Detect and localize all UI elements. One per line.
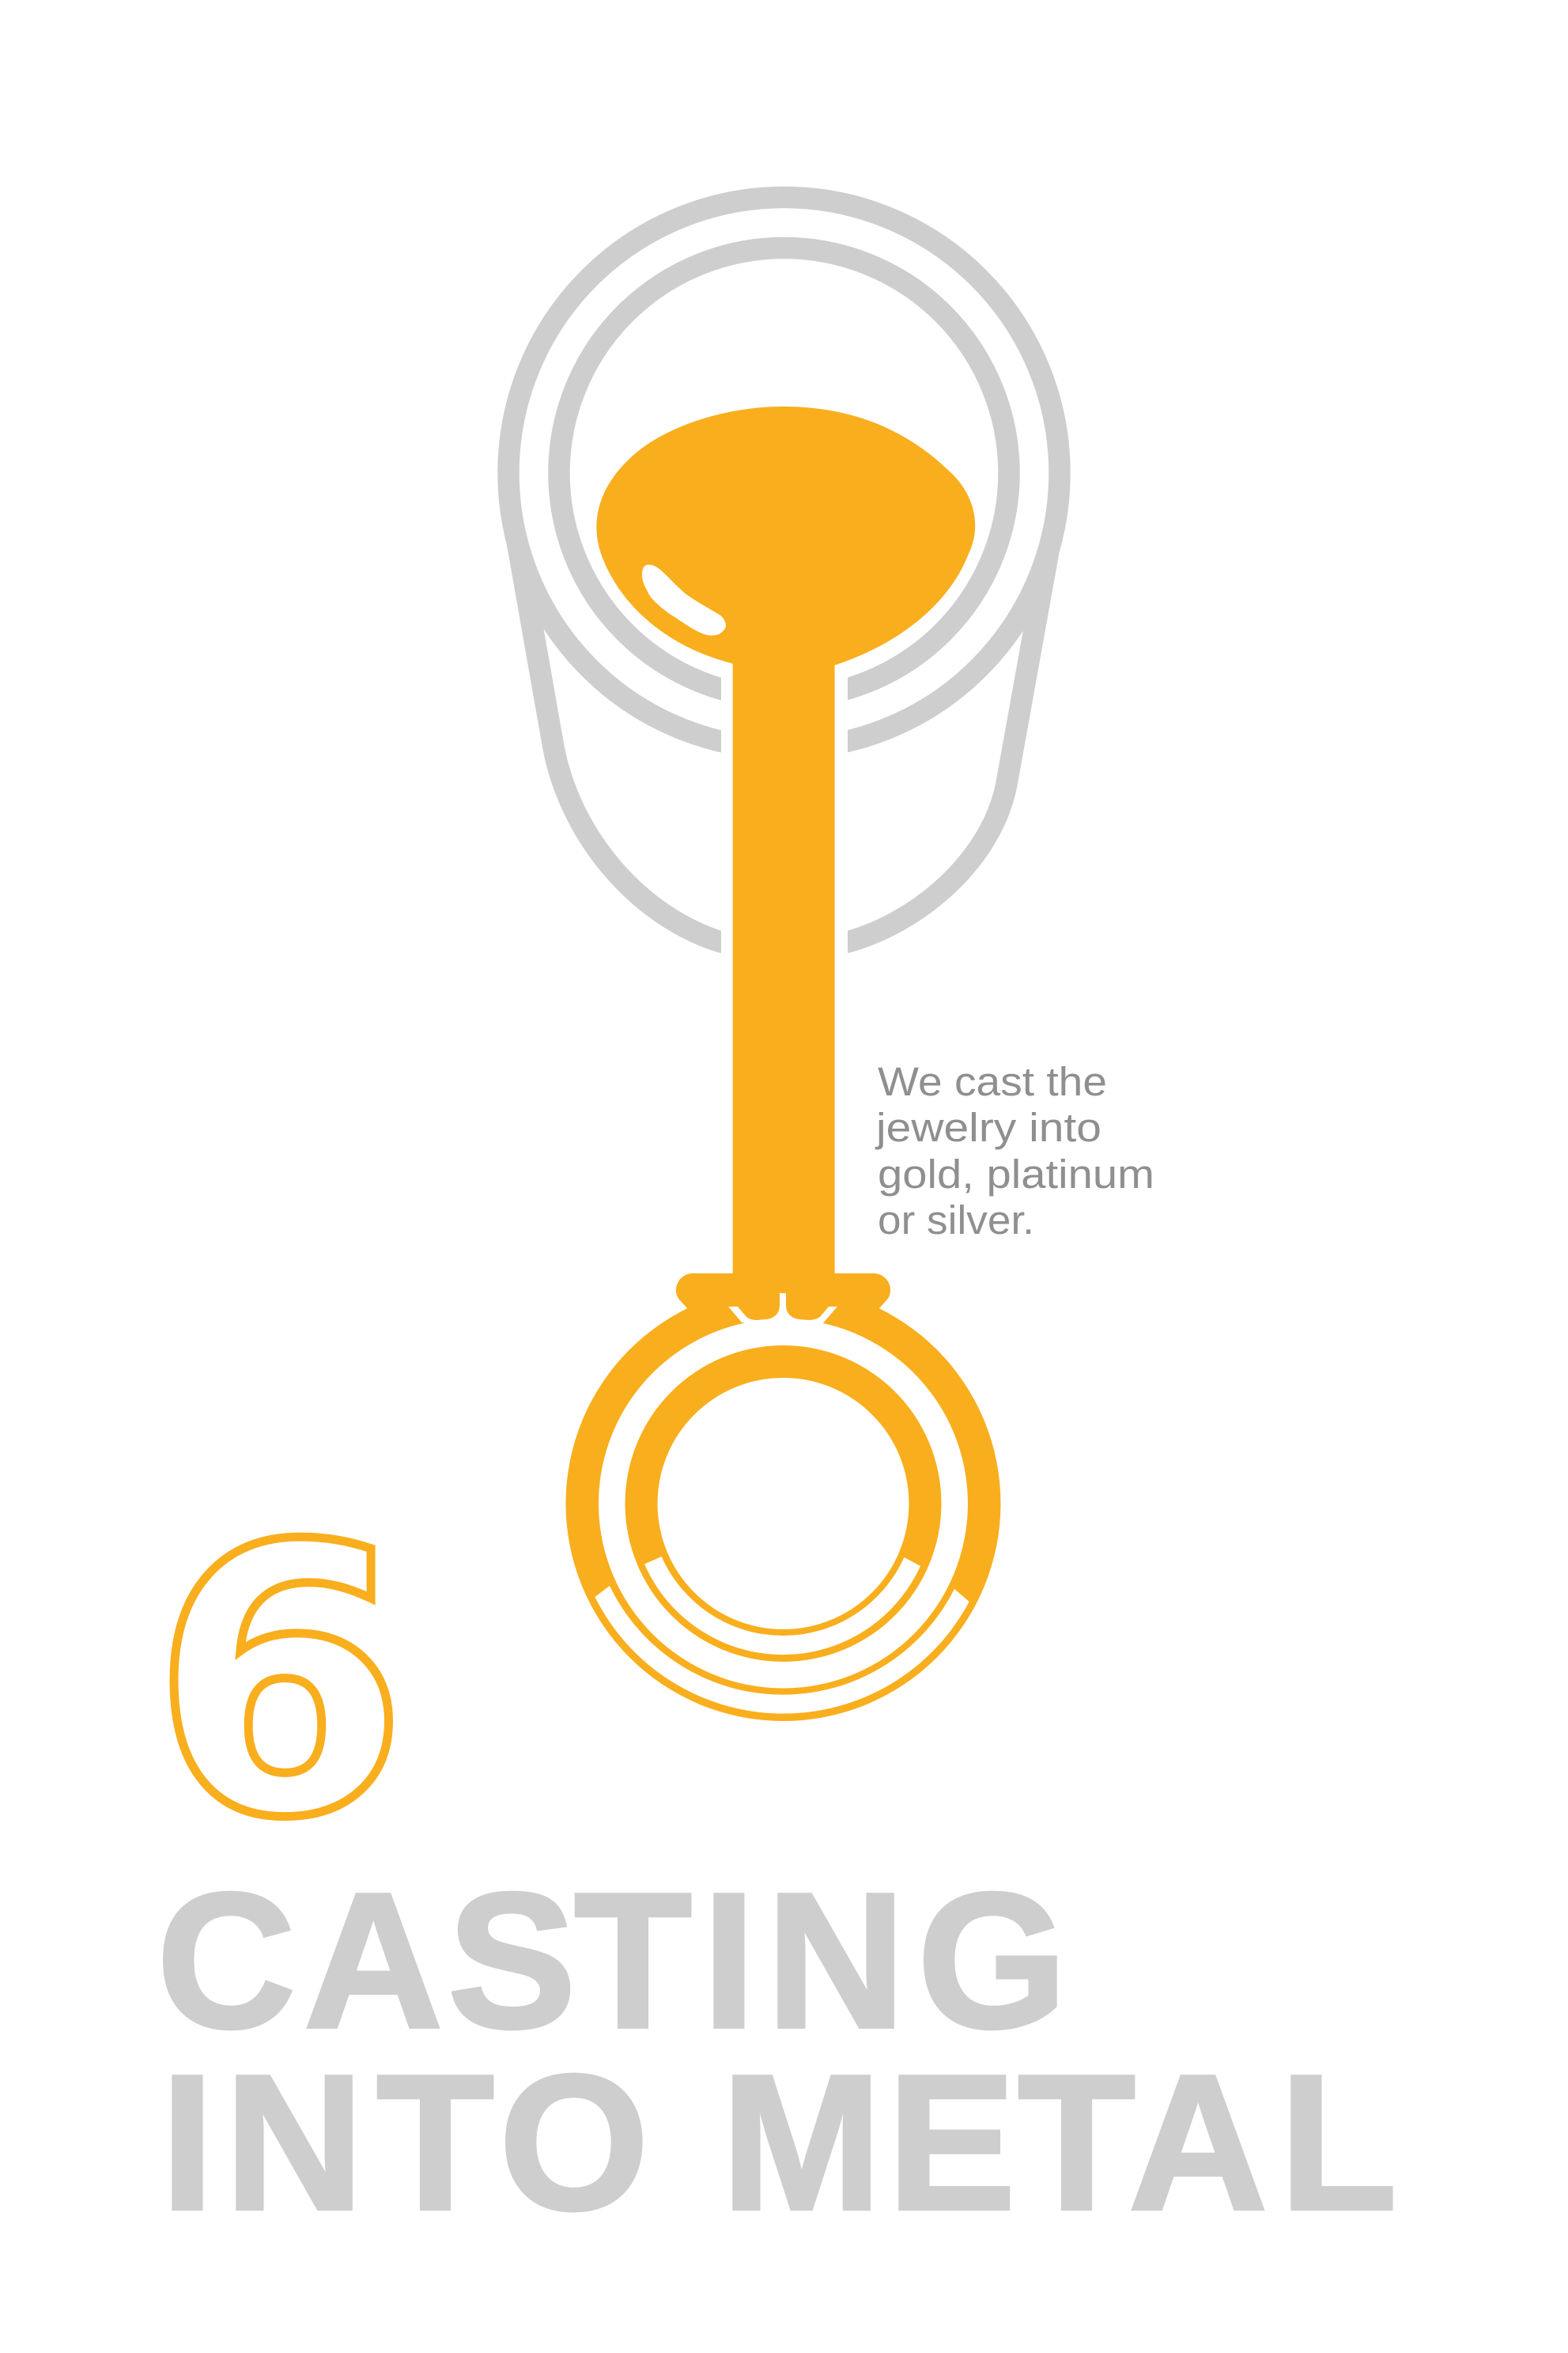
casting sprue head [676,1273,890,1323]
unfilled channel of inner ring [644,1557,920,1655]
line 3: gold, platinum [878,1152,1154,1197]
title line 1: CASTING [157,1852,1067,2068]
unfilled channel of outer ring [595,1586,969,1714]
crucible body [512,514,1051,949]
crucible inner rim [559,248,1009,698]
title line 2: INTO [161,2034,649,2250]
gap in crucible behind the metal stream [721,633,848,965]
molten metal pool and stream [596,407,975,1281]
gap at top of ring under the sprue [728,1281,837,1329]
highlight on molten metal [642,565,726,636]
icon: ring mold [566,1273,1001,1721]
crucible outer rim [508,198,1060,748]
icon: crucible vessel [508,198,1060,949]
title [157,1852,1397,2250]
step number: 6 [151,1469,409,1899]
line 4: or silver. [878,1197,1034,1243]
line 2: jewelry into [875,1105,1101,1150]
description text [875,1059,1154,1243]
outer ring band [566,1286,1001,1721]
icon: molten metal pour [596,407,975,1281]
inner ring band [625,1345,941,1662]
line 1: We cast the [878,1059,1107,1104]
title line 2: METAL [721,2034,1397,2250]
